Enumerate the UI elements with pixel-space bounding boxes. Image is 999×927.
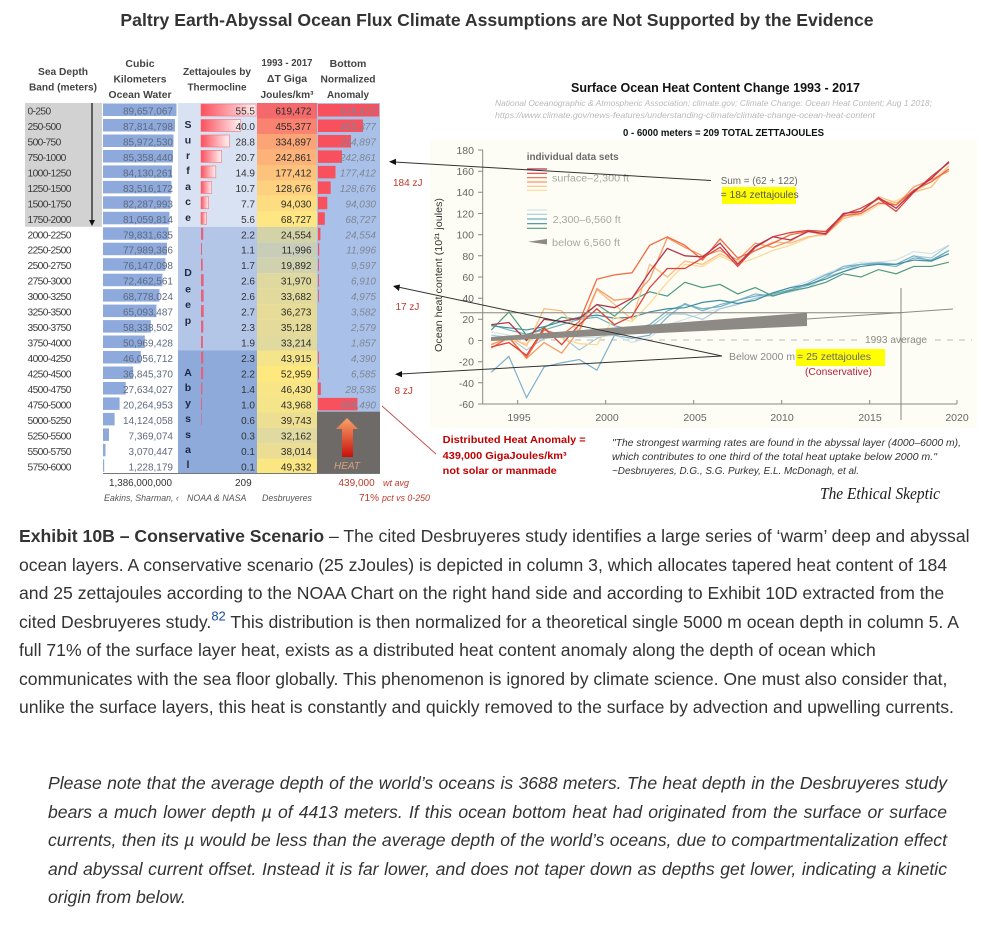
column 3: zettajoules by thermocline: 0.1 <box>241 447 255 458</box>
column 4: delta T giga joules heat map: 619,472 <box>275 106 312 118</box>
column 4: delta T giga joules heat map: 177,412 <box>275 168 312 179</box>
table column headers: ΔT Giga <box>267 73 307 85</box>
label: Deep: e <box>185 299 191 311</box>
column 4: delta T giga joules heat map: 31,970 <box>281 277 312 288</box>
column 4: delta T giga joules heat map: 33,682 <box>281 292 312 303</box>
column 3: zettajoules by thermocline: 1.0 <box>241 400 255 411</box>
column 1: sea depth bands: 4500-4750 <box>28 385 72 396</box>
column 2: cubic kilometers bars and values: 83,516,172 <box>123 184 173 195</box>
table column headers: Normalized <box>320 74 376 86</box>
label: Surface <box>184 119 192 224</box>
chart source text: National Oceanographic & Atmospheric Association; climate.gov; Climate Change: Ocean Heat Content; Aug 1 2018; <box>495 98 933 108</box>
x axis labels: 1995 <box>507 412 531 424</box>
column 1: sea depth bands: 3250-3500 <box>28 308 72 319</box>
1993 average label: 1993 average <box>865 334 927 346</box>
column 1: sea depth bands: 4750-5000 <box>28 400 72 411</box>
column 4: delta T giga joules heat map: 68,727 <box>281 215 312 226</box>
table column headers: Sea Depth <box>38 66 88 78</box>
column 1: sea depth bands: 1500-1750 <box>28 199 72 210</box>
chart title: Surface Ocean Heat Content Change 1993 - 2017 <box>571 80 860 95</box>
table column headers: Ocean Water <box>108 89 172 101</box>
label: Surface: c <box>185 196 191 208</box>
callout: below 2000 m 25 zettajoules: (Conservative) <box>805 367 872 378</box>
column 1: sea depth bands: 5500-5750 <box>28 447 72 458</box>
column 3: zettajoules by thermocline: 7.7 <box>241 199 255 210</box>
body text: Exhibit 10B description: ocean layers. A conservative scenario (25 zJoules) is depicted in column 3, which allocates tapered heat content of 184 <box>19 554 947 574</box>
column 4: delta T giga joules heat map: 334,897 <box>275 138 312 148</box>
label: Deep: p <box>185 315 191 327</box>
column 2: cubic kilometers bars and values: 89,657,067 <box>123 106 173 118</box>
panel: surface ocean heat content chart <box>430 80 977 428</box>
column 2: cubic kilometers bars and values: 65,093,487 <box>123 308 173 319</box>
label: Abyssal: l <box>187 459 190 471</box>
chart legend: below 6,560 ft <box>552 238 620 249</box>
column 2: cubic kilometers bars and values: 85,972,530 <box>123 138 173 148</box>
column 3: zettajoules by thermocline: 2.2 <box>241 230 255 241</box>
label: Abyssal: s <box>185 429 191 441</box>
column 1: sea depth bands: 750-1000 <box>28 153 67 164</box>
x axis labels: 2005 <box>683 412 707 424</box>
column 2: cubic kilometers bars and values: 81,059,814 <box>123 215 173 226</box>
column 4: delta T giga joules heat map: 455,377 <box>275 122 312 133</box>
column 2: cubic kilometers bars and values: 3,070,447 <box>128 447 173 458</box>
2017 reference lines <box>460 288 901 420</box>
callout: distributed heat anomaly: Distributed Heat Anomaly = <box>443 434 586 446</box>
arrow: 17 zJ pointer <box>393 284 722 356</box>
label: Deep: e <box>185 284 191 296</box>
column 2: cubic kilometers bars and values: 1,228,179 <box>128 462 173 473</box>
callout: distributed heat anomaly <box>443 434 586 477</box>
table totals and sources: 1,386,000,000 <box>109 478 172 489</box>
block quote: average ocean depth note: and abyssal current offset. Instead it is far lower, and does not taper down as depths get lower, indicating a kinetic <box>48 858 947 878</box>
table column headers: Anomaly <box>327 89 369 101</box>
column 5: bottom normalized anomaly: 334,897 <box>340 138 376 148</box>
y axis labels <box>456 145 474 411</box>
column 5: bottom normalized anomaly: 11,996 <box>346 246 376 257</box>
label: Abyssal: y <box>185 398 191 410</box>
column 1: sea depth bands: 1250-1500 <box>28 184 72 195</box>
column 2: cubic kilometers bars and values: 76,147,098 <box>123 261 173 272</box>
callout: below 2000 m 25 zettajoules: Below 2000 m <box>729 351 795 363</box>
column 5: bottom normalized anomaly: 94,030 <box>345 199 376 210</box>
column 2: cubic kilometers bars and values: 7,369,074 <box>128 431 173 442</box>
block quote: average ocean depth note: Please note that the average depth of the world’s oceans is 3688 meters. The heat depth in the Desbruyeres study <box>48 773 947 793</box>
y axis labels: 0 <box>468 336 474 348</box>
column 3: zettajoules by thermocline: 20.7 <box>236 153 255 164</box>
column 3: zettajoules by thermocline: 2.3 <box>241 354 255 365</box>
label: Abyssal: a <box>185 444 191 456</box>
column 5: bottom normalized anomaly: 4,390 <box>351 354 376 365</box>
column 5: bottom normalized anomaly: 177,412 <box>340 168 376 179</box>
callout: sum 184 zettajoules: = 184 zettajoules <box>721 189 799 201</box>
column 3: zettajoules by thermocline: 1.7 <box>241 261 255 272</box>
column 4: delta T giga joules heat map: 128,676 <box>275 184 312 195</box>
column 2: cubic kilometers bars and values: 50,969,428 <box>123 338 173 350</box>
column 2: cubic kilometers bars and values: 79,831,635 <box>123 230 173 241</box>
column 4: delta T giga joules heat map: 24,554 <box>281 230 312 241</box>
column 3: zettajoules by thermocline: 40.0 <box>236 122 255 133</box>
column 2: cubic kilometers bars and values: 68,778,024 <box>123 292 173 303</box>
y axis labels: -20 <box>459 356 474 368</box>
column 4: delta T giga joules heat map: 11,996 <box>282 246 312 257</box>
table column headers: 1993 - 2017 <box>262 57 313 69</box>
surface data lines <box>491 162 949 358</box>
y axis labels: 80 <box>462 251 474 263</box>
y axis labels: 20 <box>462 314 474 326</box>
column 2: cubic kilometers bars and values: 36,845,370 <box>123 370 173 380</box>
label: Deep: D <box>184 267 192 279</box>
column 4: delta T giga joules heat map: 36,273 <box>281 308 312 319</box>
body text: Exhibit 10B description: unlike the surface layers, this heat is constantly and quickly removed to the surface by advection and upwelling currents. <box>19 697 954 717</box>
callout: sum 184 zettajoules <box>721 175 799 204</box>
title: Paltry Earth-Abyssal Ocean Flux Climate Assumptions are Not Supported by the Evidence <box>120 10 874 30</box>
y axis labels: 40 <box>462 293 474 305</box>
block quote: average ocean depth note <box>48 773 948 907</box>
column 1: sea depth bands: 5250-5500 <box>28 431 72 442</box>
column 4: delta T giga joules heat map: 43,915 <box>281 354 312 365</box>
column 4: delta T giga joules heat map: 39,743 <box>281 416 312 427</box>
y axis labels: 160 <box>456 166 474 178</box>
chart axes <box>478 150 957 404</box>
chart source text <box>495 98 933 120</box>
column 1: sea depth bands: 5000-5250 <box>28 416 72 427</box>
table totals and sources: NOAA & NASA <box>187 493 246 503</box>
column 3: zettajoules by thermocline: 0.6 <box>241 416 255 427</box>
column 5: bottom normalized anomaly: 6,585 <box>351 370 376 380</box>
column 2: cubic kilometers bars and values <box>103 104 176 473</box>
block quote: average ocean depth note: bears a much lower depth µ of 4413 meters. If this ocean bottom heat had originated from the surface or surface <box>48 802 947 822</box>
column 3: zettajoules by thermocline: 2.6 <box>241 292 255 303</box>
y axis labels: 180 <box>456 145 474 157</box>
label: Surface: r <box>186 150 190 162</box>
column 4: delta T giga joules heat map: 19,892 <box>281 261 312 272</box>
column 2: cubic kilometers bars and values: 14,124,058 <box>123 416 173 427</box>
x axis labels: 2020 <box>945 412 969 424</box>
block quote: average ocean depth note: currents, then its µ would be less than the average depth of the world’s oceans, due to compartmentalization effect <box>48 830 947 850</box>
column 3: zettajoules by thermocline: 28.8 <box>236 138 255 148</box>
table totals and sources: 439,000 <box>338 478 375 489</box>
column 5: bottom normalized anomaly: 128,676 <box>340 184 376 195</box>
table column headers: Zettajoules by <box>183 66 251 78</box>
column 2: cubic kilometers bars and values: 20,264,953 <box>123 400 173 411</box>
chart legend: surface–2,300 ft <box>552 174 629 185</box>
quote: Desbruyeres citation: ~Desbruyeres, D.G., S.G. Purkey, E.L. McDonagh, et al. <box>612 465 859 477</box>
body text: Exhibit 10B description: communicates with the sea floor globally. This phenomenon is ignored by climate science. One must also consider that, <box>19 668 947 688</box>
body text: Exhibit 10B description: full 71% of the surface layer heat, exists as a distributed heat content anomaly along the depth of ocean which <box>19 640 876 660</box>
column 4: delta T giga joules heat map: 38,014 <box>281 447 312 458</box>
deep water data lines <box>491 245 949 398</box>
table totals and sources: Desbruyeres <box>262 493 312 503</box>
column 4: delta T giga joules heat map: 49,332 <box>281 462 312 473</box>
column 5: bottom normalized anomaly: 1,857 <box>351 338 376 350</box>
arrow: 184 zJ pointer <box>389 159 711 180</box>
column 1: sea depth bands: 4250-4500 <box>28 370 72 380</box>
arrow: 8 zJ pointer <box>395 356 722 377</box>
column 1: sea depth bands: 3750-4000 <box>28 338 72 350</box>
chart subtitle: 0 - 6000 meters = 209 TOTAL ZETTAJOULES <box>623 128 824 139</box>
column 1: sea depth bands: 2750-3000 <box>28 277 72 288</box>
quote: Desbruyeres citation: "The strongest warming rates are found in the abyssal layer (4000–6000 m), <box>612 437 961 449</box>
column 1: sea depth bands: 3500-3750 <box>28 323 72 334</box>
column 5: bottom normalized anomaly: 24,554 <box>344 230 376 241</box>
column 1: sea depth bands: 5750-6000 <box>28 462 72 473</box>
label: Abyssal: b <box>185 382 191 394</box>
column 2: cubic kilometers bars and values: 87,814,798 <box>123 122 173 133</box>
table column headers: Joules/km³ <box>260 89 314 101</box>
column 1: sea depth bands: 2500-2750 <box>28 261 72 272</box>
label: Surface: f <box>186 165 190 177</box>
chart legend <box>527 152 629 249</box>
table totals and sources: pct vs 0-250 <box>381 493 430 503</box>
table totals and sources: 71% <box>359 493 379 504</box>
column 1: sea depth bands: 500-750 <box>28 138 62 148</box>
column 3: zettajoules by thermocline: 2.6 <box>241 277 255 288</box>
callout: below 2000 m 25 zettajoules <box>729 349 885 378</box>
icon: heat arrow box <box>317 412 380 474</box>
column 3: zettajoules by thermocline: 2.7 <box>241 308 255 319</box>
y axis labels: 140 <box>456 187 474 199</box>
label: 184 zJ: 184 zJ <box>393 178 422 189</box>
label: Abyssal: A <box>184 367 192 379</box>
table totals and sources <box>104 478 430 504</box>
table column headers: Kilometers <box>114 74 167 86</box>
body text: Exhibit 10B description: cited Desbruyeres study.82 This distribution is then normalized for a theoretical single 5000 m ocean depth in column 5. A <box>19 608 959 632</box>
column 1: sea depth bands: 1000-1250 <box>28 168 72 179</box>
column 5: bottom normalized anomaly: 2,579 <box>350 323 376 334</box>
column 5: bottom normalized anomaly: 455,377 <box>340 122 376 133</box>
quote: Desbruyeres citation: which contributes to one third of the total heat uptake below 2000 m." <box>612 451 938 463</box>
signature: The Ethical Skeptic: The Ethical Skeptic <box>820 484 941 503</box>
column 1: sea depth bands: 3000-3250 <box>28 292 72 303</box>
column 4: delta T giga joules heat map: 46,430 <box>281 385 312 396</box>
column 5: bottom normalized anomaly: 4,975 <box>351 292 376 303</box>
column 1: sea depth bands <box>25 103 102 473</box>
column 3: zettajoules by thermocline: 10.7 <box>236 184 255 195</box>
label: Abyssal <box>184 367 192 471</box>
icon: heat arrow box: HEAT <box>334 461 361 472</box>
column 4: delta T giga joules heat map: 52,959 <box>281 370 312 380</box>
column 5: bottom normalized anomaly: 9,597 <box>351 261 376 272</box>
table column headers: Thermocline <box>188 82 247 94</box>
column 1: sea depth bands: 250-500 <box>28 122 62 133</box>
callout: distributed heat anomaly: 439,000 GigaJoules/km³ <box>443 450 567 462</box>
column 2: cubic kilometers bars and values: 46,056,712 <box>123 354 173 365</box>
column 2: cubic kilometers bars and values: 85,358,440 <box>123 153 173 164</box>
callout: below 2000 m 25 zettajoules: = 25 zettajoules <box>797 351 871 363</box>
quote: Desbruyeres citation <box>612 437 961 477</box>
column 3: zettajoules by thermocline: 0.3 <box>241 431 255 442</box>
column 2: cubic kilometers bars and values: 82,287,993 <box>123 199 173 210</box>
table column headers: Cubic <box>125 58 155 70</box>
pointer: anomaly to note <box>382 406 436 454</box>
label: Surface: u <box>185 134 191 146</box>
y axis labels: -60 <box>459 399 474 411</box>
callout: distributed heat anomaly: not solar or manmade <box>443 465 557 477</box>
column 3: zettajoules by thermocline <box>178 103 257 474</box>
column 5: bottom normalized anomaly <box>317 103 380 474</box>
table totals and sources: Eakins, Sharman, ‹ <box>104 493 179 503</box>
column 3: zettajoules by thermocline: 0.1 <box>241 462 255 473</box>
y axis labels: 60 <box>462 272 474 284</box>
column 1: sea depth bands: 2000-2250 <box>28 230 72 241</box>
label: 8 zJ: 8 zJ <box>394 386 413 397</box>
x axis labels: 2015 <box>858 412 882 424</box>
body text: Exhibit 10B description: Exhibit 10B – Conservative Scenario – The cited Desbruyeres study identifies a large series of ‘warm’ deep and abyssal <box>19 526 970 546</box>
column 1: sea depth bands: 4000-4250 <box>28 354 72 365</box>
body text: Exhibit 10B description: and 25 zettajoules according to the NOAA Chart on the right hand side and according to Exhibit 10D extracted from the <box>19 583 944 603</box>
y axis labels: -40 <box>459 378 474 390</box>
label: Deep <box>184 267 192 327</box>
column 1: sea depth bands: 0-250 <box>28 106 51 118</box>
column 3: zettajoules by thermocline: 2.2 <box>241 370 255 380</box>
column 5: bottom normalized anomaly: 68,727 <box>345 215 376 226</box>
zero baseline <box>491 339 972 341</box>
chart legend: individual data sets <box>527 152 619 163</box>
column 2: cubic kilometers bars and values: 77,989,366 <box>123 246 173 257</box>
table totals and sources: wt avg <box>383 478 409 488</box>
x axis labels: 2000 <box>595 412 619 424</box>
y axis title: Ocean heat content (10²¹ joules) <box>433 198 445 352</box>
column 2: cubic kilometers bars and values: 72,462,561 <box>123 277 173 288</box>
column 3: zettajoules by thermocline: 14.9 <box>236 168 255 179</box>
column 5: bottom normalized anomaly: 3,582 <box>351 308 376 319</box>
x axis labels <box>507 412 969 424</box>
column 4: delta T giga joules heat map: 94,030 <box>281 199 312 210</box>
column 4: delta T giga joules heat map: 35,128 <box>281 323 312 334</box>
column 5: bottom normalized anomaly: 619,472 <box>340 106 376 118</box>
exhibit graphic: data table and ocean heat chart <box>25 57 977 504</box>
table column headers <box>29 57 376 101</box>
label: 17 zJ: 17 zJ <box>396 302 419 313</box>
column 5: bottom normalized anomaly: 6,910 <box>351 277 376 288</box>
column 4: delta T giga joules heat map: 32,162 <box>281 431 312 442</box>
label: Surface: S <box>184 119 192 131</box>
column 4: delta T giga joules heat map: 242,861 <box>275 153 312 164</box>
chart legend: 2,300–6,560 ft <box>553 215 621 226</box>
column 5: bottom normalized anomaly: 399,490 <box>340 400 376 411</box>
column 5: bottom normalized anomaly: 28,535 <box>344 385 376 396</box>
column 2: cubic kilometers bars and values: 27,634,027 <box>123 385 173 396</box>
column 3: zettajoules by thermocline: 1.9 <box>241 338 255 350</box>
column 3: zettajoules by thermocline: 1.1 <box>241 246 255 257</box>
column 4: delta T giga joules heat map <box>257 103 317 474</box>
below 6,560 ft wedge <box>491 309 953 341</box>
y axis labels: 120 <box>456 208 474 220</box>
callout: sum 184 zettajoules: Sum = (62 + 122) <box>721 175 798 187</box>
label: Surface: e <box>185 212 191 224</box>
column 5: bottom normalized anomaly: 242,861 <box>339 153 376 164</box>
column 1: sea depth bands: 1750-2000 <box>28 215 72 226</box>
block quote: average ocean depth note: origin from below. <box>48 887 186 907</box>
arrow: depth direction <box>89 103 95 226</box>
column 3: zettajoules by thermocline: 5.6 <box>241 215 255 226</box>
column 3: zettajoules by thermocline: 2.3 <box>241 323 255 334</box>
column 3: zettajoules by thermocline: 55.5 <box>236 106 255 118</box>
panel: ocean depth data table <box>25 57 430 504</box>
table column headers: Band (meters) <box>29 82 97 94</box>
body text: Exhibit 10B description <box>19 526 970 717</box>
column 4: delta T giga joules heat map: 43,968 <box>281 400 312 411</box>
table totals and sources: 209 <box>235 478 252 489</box>
y axis labels: 100 <box>456 230 474 242</box>
column 2: cubic kilometers bars and values: 84,130,261 <box>123 168 173 179</box>
label: Surface: a <box>185 181 191 193</box>
column 4: delta T giga joules heat map: 33,214 <box>281 338 312 350</box>
column 3: zettajoules by thermocline: 1.4 <box>241 385 255 396</box>
column 1: sea depth bands: 2250-2500 <box>28 246 72 257</box>
label: Abyssal: s <box>185 413 191 425</box>
column 2: cubic kilometers bars and values: 58,338,502 <box>123 323 173 334</box>
chart source text: https://www.climate.gov/news-features/understanding-climate/climate-change-ocean-heat-content <box>495 110 876 120</box>
x axis labels: 2010 <box>770 412 794 424</box>
table column headers: Bottom <box>330 58 366 70</box>
